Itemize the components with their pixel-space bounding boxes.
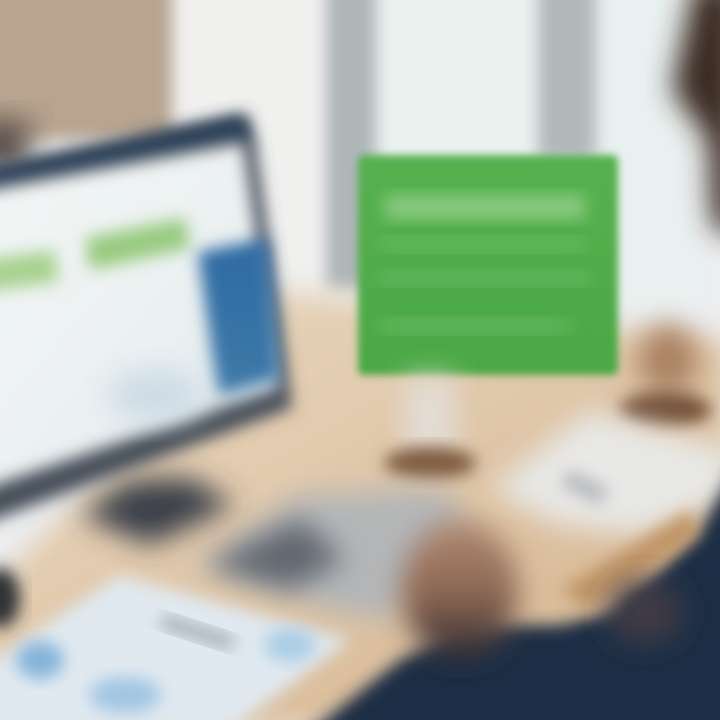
desk surface [0,290,720,720]
chart circle right [264,628,316,662]
panel heading line [385,195,585,219]
monitor screen [0,143,278,490]
jacket [300,460,720,720]
desk figurine [619,324,711,428]
green bar right [85,218,190,270]
chart circle left [16,641,64,679]
panel stand [384,378,476,479]
arm [560,510,700,610]
document text [160,614,235,650]
dark object at left edge [0,568,20,628]
screen chart [107,369,203,421]
document with charts [0,575,350,720]
window posts [326,0,596,290]
chart circle bottom [89,677,161,713]
keyboard [200,488,470,620]
green panel [358,155,618,375]
person at top right [672,0,720,240]
monitor stand [80,478,235,545]
blue side panel [198,238,280,396]
papers on desk [490,410,720,535]
panel text lines [380,238,590,332]
person in foreground [300,460,720,720]
monitor [0,115,292,545]
monitor frame [0,115,292,525]
head [402,520,518,660]
green bar left [0,250,58,292]
hand [607,580,683,644]
